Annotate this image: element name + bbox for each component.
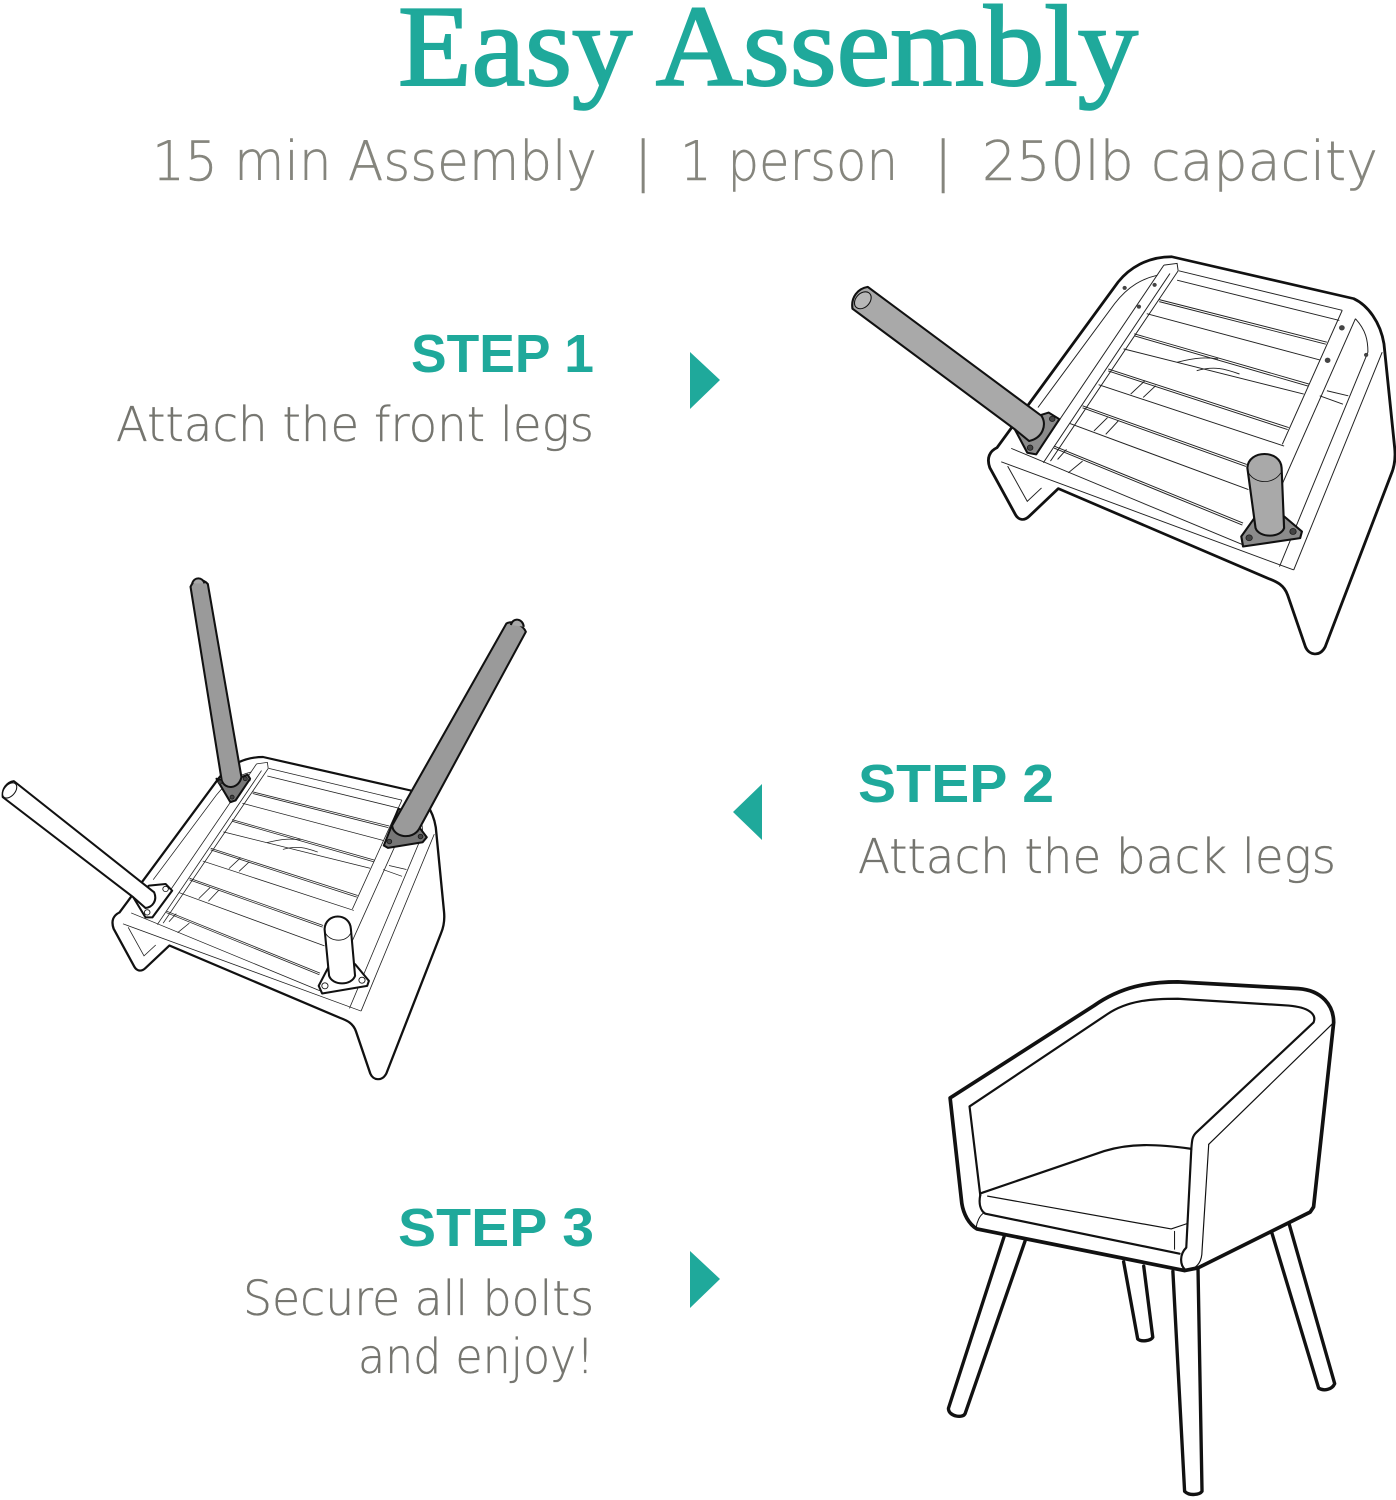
step 2 text: STEP 2: [858, 754, 1054, 814]
subtitle: assembly facts: |: [934, 130, 952, 193]
step 1 text: Attach the front legs: [116, 397, 594, 453]
short front leg: [1241, 454, 1302, 547]
illustration: assembled chair: [948, 982, 1335, 1494]
arrow: step 2: [733, 784, 762, 840]
chair body: [950, 982, 1334, 1271]
subtitle: assembly facts: [152, 130, 1378, 193]
step 3 text: STEP 3: [398, 1198, 594, 1258]
step 3 text: [243, 1198, 594, 1385]
legs: [948, 1224, 1335, 1494]
subtitle: assembly facts: 1 person: [680, 130, 898, 193]
arrow: step 1: [690, 352, 720, 409]
white attached short leg: [319, 917, 369, 994]
subtitle: assembly facts: 250lb capacity: [982, 130, 1378, 193]
step 2 text: Attach the back legs: [858, 829, 1336, 885]
white attached long leg: [0, 780, 172, 917]
step 1 text: [116, 324, 594, 453]
gray back leg, center: [191, 578, 250, 802]
subtitle: assembly facts: 15 min Assembly: [152, 130, 597, 193]
step 3 text: and enjoy!: [358, 1329, 594, 1385]
arrow: step 3: [690, 1251, 720, 1308]
illustration: step 1 chair with front legs: [851, 257, 1395, 654]
illustration: step 2 chair with back legs: [0, 578, 526, 1080]
step 1 text: STEP 1: [411, 324, 594, 384]
gray back leg, right: [384, 620, 526, 848]
long front leg: [851, 287, 1059, 454]
subtitle: assembly facts: |: [634, 130, 652, 193]
step 2 text: [858, 754, 1336, 885]
step 3 text: Secure all bolts: [243, 1271, 594, 1327]
